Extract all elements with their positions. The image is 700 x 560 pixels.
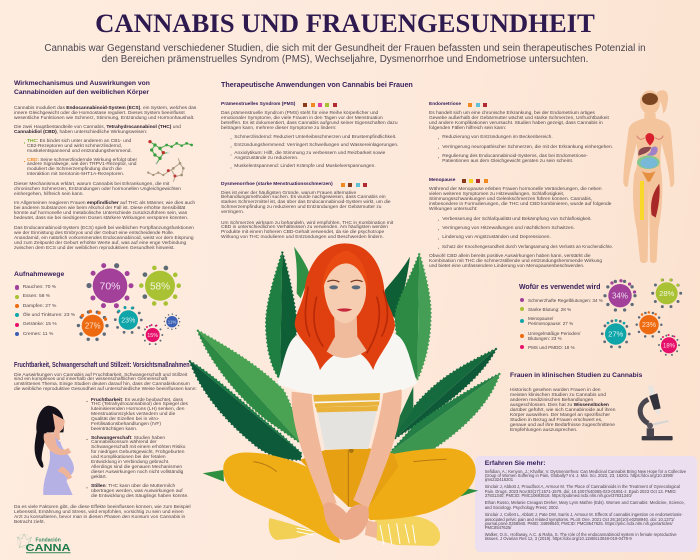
legend item: Unregelmäßige xyxy=(520,331,580,341)
text: Dysmenorrhoe: Behandlungsmethoden suchen. Es wurde nachgewiesen, dass Cannabis ein xyxy=(221,195,386,200)
bubble: 11: 11% xyxy=(168,319,176,324)
text: Einleitung: die weibliche reproduktive Gesundheit auf unterschiedliche Weise beeinflussen kann: xyxy=(14,387,197,392)
text: Dysmenorrhoe xyxy=(221,190,391,215)
text: empfindlicher: könnte auf hormonelle und metabolische Unterschiede zurückzuführen sein, was xyxy=(14,211,187,216)
text: Frauen in klinischen Studien: ausgeschlossen. Dies hat zu Wissenslücken xyxy=(510,403,609,408)
text: Frauen in klinischen Studien: meisten klinischen Studien zu Cannabis und xyxy=(510,393,606,398)
reference 4 xyxy=(485,513,683,530)
heart xyxy=(645,133,654,146)
heading: Erfahren Sie mehr: Erfahren Sie mehr: xyxy=(485,460,546,467)
color squares: Menopause xyxy=(462,179,488,183)
text: empfindlicher xyxy=(14,200,195,221)
text: Hauptbestandteile: Die zwei Hauptbestandteile von Cannabis, Tetrahydrocannabinol (THC) und xyxy=(14,125,181,130)
legend item: PMS: PMS und PMDD: 18 % xyxy=(528,345,575,350)
text: empfindlicher: bei anderen Substanzen wie beim Alkohol der Fall ist. Diese erhöhte Sensibilität xyxy=(14,206,185,211)
text: Menopause: Während der Menopause erleben Frauen hormonelle Veränderungen, die neben xyxy=(429,187,602,192)
bullet: Fruchtbarkeit: Fruchtbarkeit: Es wurde beobachtet, dass xyxy=(91,398,183,402)
text: THC CBD Kombination: Produkte mit einem höheren CBD-Gehalt verwendet, da sie die psychotrope xyxy=(221,230,384,235)
reference 2: 37831340; PMCID: PMC10693518. https://pubmed.ncbi.nlm.nih.gov/37831340/ xyxy=(485,493,632,498)
text: CBD: moduliert die Schmerzempfindung durch die xyxy=(27,167,122,172)
text: THC CBD Kombination: CBD in unterschiedlichen Verhältnissen zu verwenden. Am häufigsten werden xyxy=(221,225,388,230)
list: PMS xyxy=(234,134,398,169)
logo: Fundación CANNA: CANNA xyxy=(26,543,71,554)
reference 5: Walker, O.S., Holloway, A.C. & Raha, S. The role of the endocannabinoid system in female reproductive xyxy=(485,532,677,537)
nerve xyxy=(640,181,644,220)
chart: Aufnahmewege bubbles xyxy=(78,265,180,345)
heading: Therapeutische Anwendungen: Therapeutische Anwendungen von Cannabis bei Frauen xyxy=(221,80,413,89)
text: Menopause: insbesondere in Formulierungen, die THC und CBD kombinieren, wurde auf folgende xyxy=(429,202,611,207)
bullet: Fruchtbarkeit: Qualität der Eizellen bei in vitro- xyxy=(91,417,159,422)
subheading: PMS: Prämenstruelles Syndrom (PMS) xyxy=(221,102,295,107)
text: Dysmenorrhoe: verringern. xyxy=(221,210,244,215)
uterus xyxy=(642,171,656,182)
bubble: 27: 27% xyxy=(85,322,101,331)
text: THC CBD Kombination: Wirkung von THC modulieren und Entzündungen und Beschwerden lindern. xyxy=(221,235,384,240)
heading: Wirkmechanismus xyxy=(14,80,150,96)
reference 3: Ethan Russo, Melanie Creagan Dreher, Mary Lynn Mathre (Eds). Women and Cannabis: Medicine, Science, xyxy=(485,500,685,505)
text: Frauen in klinischen Studien xyxy=(510,388,616,433)
bullet: Stillen: übertragen werden, was Auswirkungen auf xyxy=(91,489,183,494)
list: Endometriose: Patientinnen aus dem Gleichgewicht geraten zu sein scheint. xyxy=(442,159,573,164)
legend item: Menopause: Menopause/ xyxy=(528,316,553,321)
text: PMS: emotionaler Symptome, die viele Frauen in den Tagen vor der Menstruation xyxy=(221,116,383,121)
text: ECS: wesentliche Funktionen wie Schmerz, Stimmung, Entzündung und Hormonhaushalt. xyxy=(14,116,194,121)
bubble: 34: 34% xyxy=(612,292,628,301)
bullet: Fruchtbarkeit xyxy=(91,398,188,432)
reference 4: associated pelvic pain and related symptoms. PLoS One. 2021 Oct 26;16(10):e0258940. doi: 10.1371/ xyxy=(485,517,674,522)
icon: pregnant woman xyxy=(35,406,74,495)
bullet: Fruchtbarkeit: THC (Tetrahydrocannabinol) den Spiegel des xyxy=(91,402,188,407)
text: Einleitung: Die Auswirkungen von Cannabis auf Fruchtbarkeit, Schwangerschaft und Stillzeit xyxy=(14,372,187,378)
bullet: Schwangerschaft xyxy=(91,436,186,480)
text: Einleitung xyxy=(14,372,197,392)
text: Menopause xyxy=(429,186,612,212)
text: Schluss: Betracht zieht. xyxy=(14,520,45,525)
bullet: Schwangerschaft: geklärt. xyxy=(91,475,107,480)
bullet: Schwangerschaft: Entwicklung in Verbindung gebracht. xyxy=(91,460,169,465)
panel: Endometriose und Menopause xyxy=(429,102,613,269)
bullet: Fruchtbarkeit: Fertilisationsbehandlungen (IVF) xyxy=(91,422,161,427)
reference 2: Sinclair J, Abbott J, Proudfoot A, Armour M. The Place of Cannabinoids in the Treatment of Gynecological xyxy=(485,484,680,489)
icon: CBD molecule xyxy=(147,158,185,182)
text: Frauen in klinischen Studien: Studien in Bezug auf Frauen erschwert es, xyxy=(510,418,602,423)
list: Menopause: Verringerung von Hitzewallungen und nächtlichem Schwitzen. xyxy=(442,226,575,231)
reference 5: tissues. J Ovarian Res 12, 3 (2019). https://doi.org/10.1186/s13048-019-0478-9 xyxy=(485,536,632,541)
text: Hauptbestandteile: Cannabidiol (CBD), haben unterschiedliche Wirkungsweisen: xyxy=(14,130,147,135)
legend item: Starke Blutung: Starke Blutung: 28 % xyxy=(528,307,571,312)
reference 2 xyxy=(485,485,680,498)
text: THC: CB2-Rezeptoren und wirkt schmerzlindernd, xyxy=(27,144,122,149)
text: Dysmenorrhoe: Schmerzempfindung zu reduzieren und Entzündungen der Gebärmutter zu xyxy=(221,205,381,210)
panel: Wirkmechanismus xyxy=(14,80,196,251)
bubble: 27: 27% xyxy=(608,330,624,339)
text: THC CBD Kombination: Um Schmerzen wirksam zu behandeln, wird empfohlen, THC in Kombination mit xyxy=(221,220,393,226)
bullet: Schwangerschaft: Schwangerschaft: Studien haben xyxy=(91,436,165,440)
text: Frauen in klinischen Studien: Körper auswirken. Der Mangel an spezifischer xyxy=(510,413,610,418)
text: Frauen in klinischen Studien: Historisch gesehen wurden Frauen in den xyxy=(510,388,601,392)
muscle xyxy=(651,184,660,218)
legend item: Unregelmäßige: Unregelmäßige Perioden/ xyxy=(528,331,580,336)
text: CBD: CBD: Seine schmerzlindernde Wirkung erfolgt über xyxy=(27,158,137,162)
subheading: Menopause: Menopause xyxy=(429,178,455,183)
legend item: Rauchen: Rauchen: 70 % xyxy=(23,285,56,290)
text: THC CBD Kombination xyxy=(221,220,394,240)
text: THC: THC: Es bindet sich unter anderem an CB1- und xyxy=(27,139,131,144)
bubble: 28: 28% xyxy=(659,289,675,298)
heading: Wirkmechanismus: Wirkmechanismus und Auswirkungen von xyxy=(14,80,150,87)
bullet: Schwangerschaft: für niedriges Geburtsgewicht, Frühgeburten xyxy=(91,450,184,455)
text: ECS: innere Gleichgewicht oder die Homöostase reguliert. Dieses System beeinflusst xyxy=(14,111,185,116)
text: PMS: Das prämenstruelle Syndrom (PMS) steht für eine Reihe körperlicher und xyxy=(221,111,378,116)
subheading: Dysmenorrhoe: Dysmenorrhoe (starke Menstruationsschmerzen) xyxy=(221,182,333,187)
text: Menopause Schluss: Kombination mit THC die schmerzstillende und entzündungshemmende Wirkung xyxy=(429,259,602,264)
reference 3: and Sociology. Psychology Press; 2002. xyxy=(485,505,559,510)
bullet: Stillen xyxy=(91,484,188,499)
text: PMS: betreffen. Es ist dokumentiert, dass Cannabis aufgrund seiner Eigenschaften dazu xyxy=(221,121,398,126)
text: ECS xyxy=(14,106,196,121)
panel: Therapeutische Anwendungen links xyxy=(221,80,413,240)
text: Mechanismus xyxy=(14,182,181,197)
face xyxy=(324,263,366,323)
text: Menopause: Stimmungsschwankungen und Gelenkschmerzen führen können. Cannabis, xyxy=(429,197,592,202)
text: Endometriose: Es handelt sich um eine chronische Erkrankung, bei der Endometrium artiges xyxy=(429,111,595,116)
breast glands xyxy=(637,136,663,139)
logo: Fundación CANNA xyxy=(17,534,71,554)
legend item: Dampfen: Dampfen: 27 % xyxy=(23,304,56,309)
subheading: Endometriose: Endometriose xyxy=(429,102,461,107)
reference 5 xyxy=(485,533,677,542)
text: Hauptbestandteile xyxy=(14,124,181,135)
illustration: woman with cannabis leaves xyxy=(189,243,500,546)
reference 3 xyxy=(485,501,685,510)
text: CBD xyxy=(27,158,138,177)
bullet: Schwangerschaft: dieser Auswirkungen noch nicht vollständig xyxy=(91,470,183,475)
color squares: Dysmenorrhoe xyxy=(341,183,367,187)
bubble: 18: 18% xyxy=(663,344,676,350)
hair xyxy=(295,243,395,370)
text: empfindlicher: bedeutet, dass sie bei niedrigeren Dosen stärkere Wirkungen verspüren könnten. xyxy=(14,216,188,221)
text: Schluss xyxy=(14,504,191,525)
panel: Frauen in klinischen Studien xyxy=(510,370,630,434)
panel: Aufnahmewege legend xyxy=(14,271,75,336)
list: PMS: Schmerzlindernd: Reduziert Unterleibsschmerzen und Brustempfindlichkeit. xyxy=(234,135,396,140)
reference 2: Pain. Drugs. 2023 Nov;83(17):1571-1579. doi: 10.1007/s40265-023-01951-z. Epub 2023 Oct 13. PMID: xyxy=(485,489,677,494)
text: Fortpflanzung: Das Endocannabinoid-System (ECS) spielt bei weiblichen Fortpflanzungsfunktionen xyxy=(14,226,194,231)
list: PMS: Muskelentspannend: Lindert Krämpfe und Muskelverspannungen. xyxy=(234,164,376,169)
title: CANNABIS UND FRAUENGESUNDHEIT xyxy=(95,8,595,38)
bubble: 15: 15% xyxy=(147,333,158,339)
text: Menopause: vielen weiteren Symptomen zu Hitzewallungen, Schlaflosigkeit, xyxy=(429,192,564,197)
text: Frauen in klinischen Studien: anderen medizinischen Behandlungen xyxy=(510,398,593,403)
text: Frauen in klinischen Studien: Empfehlungen auszusprechen. xyxy=(510,428,577,433)
text: Fortpflanzung: wie der Einnistung des Embryos und der Geburt eine entscheidende Rolle. xyxy=(14,231,174,236)
legend item: Cremes: Cremes: 11 % xyxy=(23,332,53,336)
reference 1: Sefidian, A.; Kenyon, J.; Khalfar, V. Dysmenorrhea: Can Medicinal Cannabis Bring New Hope for a Collective xyxy=(485,469,686,474)
list: Endometriose: Verringerung neuropathischer Schmerzen, die mit der Erkrankung einhergehen. xyxy=(442,145,613,150)
list: PMS: Entzündungshemmend: Verringert Schwellungen und Wassereinlagerungen. xyxy=(234,143,398,148)
list: PMS: Angstzustände zu reduzieren. xyxy=(234,156,298,161)
subtitle: Cannabis war Gegenstand verschiedener Studien, die sich mit der Gesundheit der Frauen befassten und sein therapeutisches Potenzial in xyxy=(44,42,646,54)
heading: Wofür: Wofür es verwendet wird xyxy=(519,284,600,290)
list: Menopause: Schutz der Knochengesundheit durch Verlangsamung des Verlusts an Knochendichte. xyxy=(442,245,613,250)
heading: Wirkmechanismus: Cannabinoiden auf den weiblichen Körper xyxy=(14,89,149,96)
bubble: 23: 23% xyxy=(642,322,656,329)
chart: Wofür bubbles xyxy=(602,279,681,355)
liver and stomach xyxy=(638,147,651,156)
text: Einleitung: umstrittenes Thema. Einige Studien deuten darauf hin, dass der Cannabiskonsum xyxy=(14,382,190,387)
text: Endometriose: und andere Komplikationen verursacht. Studien haben gezeigt, dass Cannabis in xyxy=(429,121,603,126)
text: CBD: andere Signalwege, wie den TRPV1-Rezeptor, und xyxy=(27,162,137,167)
text: Endometriose: Gewebe außerhalb der Gebärmutter wächst und starke Schmerzen, Unfruchtbarkeit xyxy=(429,116,609,121)
shoes xyxy=(269,518,317,540)
panel: Erfahren Sie mehr xyxy=(475,456,697,552)
text: Dysmenorrhoe: Dies ist einer der häufigsten Gründe, warum Frauen alternative xyxy=(221,190,356,196)
reference 1: ijms232416201 xyxy=(485,477,513,482)
text: Schluss: Arzt zu konsultieren, bevor man in diesen Phasen den Konsum von Cannabis in xyxy=(14,515,185,520)
arms and hands xyxy=(292,392,337,507)
list: Menopause: Verbesserung der Schlafqualität und Bekämpfung von Schlaflosigkeit. xyxy=(442,217,592,222)
bullet: Stillen: Stillen: THC kann über die Muttermilch xyxy=(91,484,175,489)
subtitle xyxy=(44,42,646,64)
logo: Fundación CANNA: Fundación xyxy=(36,538,61,544)
legend item: Unregelmäßige: Blutungen: 23 % xyxy=(528,336,562,341)
text: Fortpflanzung: und zum Zeitpunkt der Geburt erhöhte Werte auf, was auf eine enge Verbindung xyxy=(14,241,186,246)
list: Endometriose: Regulierung des Endocannabinoid-Systems, das bei Endometriose- xyxy=(442,154,588,159)
legend item: Schmerzhafte: Schmerzhafte Regelblutungen: 34 % xyxy=(528,298,603,302)
text: Dysmenorrhoe: starkes Schmerzmittel ist, das über das Endocannabinoid-System wirkt, um die xyxy=(221,200,391,205)
text: Frauen in klinischen Studien: darüber geführt, wie sich Cannabinoide auf ihren xyxy=(510,408,616,413)
color squares: Endometriose xyxy=(468,103,487,107)
list: Menopause xyxy=(442,216,613,250)
text: PMS: beitragen kann, mehrere dieser Symptome zu lindern: xyxy=(221,126,337,131)
text: Fortpflanzung xyxy=(14,226,194,251)
text: Menopause Schluss: Obwohl CBD allein bereits positive Auswirkungen haben kann, verstärkt die xyxy=(429,254,591,259)
reference 1 xyxy=(485,470,686,483)
legend item: Menopause: Perimenopause: 27 % xyxy=(528,321,573,326)
bubble: 58: 58% xyxy=(150,281,170,292)
text: THC: muskelentspannend und entzündungshemmend. xyxy=(27,149,132,154)
brain xyxy=(642,93,658,105)
text: Fortpflanzung: zwischen dem ECS und der weiblichen reproduktiven Gesundheit hinweist. xyxy=(14,246,175,251)
cannabis leaves xyxy=(189,247,500,497)
list: PMS: Anxiolytikum: Hilft, die Stimmung zu verbessern und Reizbarkeit sowie xyxy=(234,151,385,156)
bubble: 23: 23% xyxy=(121,318,135,325)
legend item: Essen: Essen: 58 % xyxy=(23,294,50,299)
icon: THC molecule xyxy=(148,140,193,164)
reference 4: PMC8547625/ xyxy=(485,525,511,530)
text: Frauen in klinischen Studien: genaue und auf ihre Bedürfnisse zugeschnittene xyxy=(510,423,615,428)
bubble: 70: 70% xyxy=(99,280,121,292)
bullet: Schwangerschaft: Allerdings sind die genauen Mechanismen xyxy=(91,465,182,470)
neck and chest xyxy=(327,313,367,358)
bullet: Schwangerschaft: und Komplikationen bei der fetalen xyxy=(91,455,166,460)
text: Menopause: Wirkungen untersucht: xyxy=(429,207,477,212)
bullet: Stillen: die Entwicklung des Säuglings haben könnte. xyxy=(91,494,188,499)
bullet: Fruchtbarkeit: beeinträchtigen kann. xyxy=(91,427,137,432)
illustration: human body with organs xyxy=(623,90,674,263)
text: empfindlicher: Im Allgemeinen reagieren Frauen empfindlicher auf THC als Männer, wie dies auch xyxy=(14,201,195,206)
text: Schluss: Da es viele Faktoren gibt, die diese Effekte beeinflussen können, wie zum Beispiel xyxy=(14,505,191,510)
legend item: Menopause xyxy=(520,316,574,326)
body silhouette xyxy=(623,113,674,263)
text: CBD: Interaktion mit Serotonin-5HT1A-Rezeptoren. xyxy=(27,172,124,177)
list: Endometriose xyxy=(442,134,613,164)
heading: Aufnahmewege: Aufnahmewege xyxy=(14,271,64,278)
text: Fortpflanzung: Anandamid, ein natürlich vorkommendes Endocannabinoid, weist vor dem Eisprung xyxy=(14,236,194,241)
legend item: Getränke: Getränke: 15 % xyxy=(23,322,57,327)
bullet: Schwangerschaft: Cannabiskonsum während der xyxy=(91,440,157,445)
text: Mechanismus: einhergehen, hilfreich sein kann. xyxy=(14,192,84,197)
reference 1: Group of Women Suffering in Pain, Globally? Int. J. Mol. Sci. 2022, 23, 16201. https://doi.org/10.3390/ xyxy=(485,473,673,478)
reference 4: Sinclair J, Collett L, Abbott J, Pate DW, Sarris J, Armour M. Effects of cannabis ingestion on endometriosis- xyxy=(485,512,683,517)
text: Schluss: Lebensstil, Ernährung und Stress, wird empfohlen, vorsichtig zu sein und einen xyxy=(14,510,184,515)
text: Endometriose: folgenden Fällen hilfreich sein kann: xyxy=(429,126,506,131)
color squares: PMS xyxy=(303,103,337,107)
list: Menopause: Linderung von Angstzuständen und Depressionen. xyxy=(442,235,551,240)
heading: Fruchtbarkeit: Fruchtbarkeit, Schwangerschaft und Stillzeit: Vorsichtsmaßnahmen xyxy=(14,360,190,368)
text: THC xyxy=(27,138,132,154)
shirt xyxy=(277,333,417,448)
bullet: Fruchtbarkeit: Menstruationszyklus verändern und die xyxy=(91,412,175,417)
intestines xyxy=(637,156,660,169)
bullet: Schwangerschaft: Schwangerschaft mit einem erhöhten Risiko xyxy=(91,445,186,450)
text: PMS xyxy=(221,110,398,131)
heading: Frauen in klinischen Studien: Frauen in klinischen Studien zu Cannabis xyxy=(510,372,642,378)
subtitle: den Bereichen prämenstruelles Syndrom (PMS), Wechseljahre, Dysmenorrhoe und Endometriose untersuchten. xyxy=(102,54,588,64)
text: Mechanismus: chronischen Schmerzen, Entzündungen oder hormonellen Ungleichgewichten xyxy=(14,187,181,192)
panel: Wofür legend xyxy=(519,284,603,350)
text: Endometriose xyxy=(429,110,609,131)
text: Einleitung: sind ein komplexes und innerhalb der wissenschaftlichen Gemeinschaft xyxy=(14,377,167,382)
panel: Fruchtbarkeit xyxy=(14,360,197,525)
pants xyxy=(347,448,476,520)
text: ECS: Cannabis moduliert das Endocannabinoid-System (ECS), ein System, welches das xyxy=(14,106,196,111)
text: Menopause Schluss xyxy=(429,254,602,269)
text: Menopause Schluss: und bietet eine umfassendere Linderung von Menopausenbeschwerden. xyxy=(429,264,584,269)
icon: microscope xyxy=(640,385,673,440)
bullet: Fruchtbarkeit: luteinisierenden Hormons (LH) senken, den xyxy=(91,407,184,412)
reference 4: journal.pone.0258940. PMID: 34699540; PMCID: PMC8547625. https://pmc.ncbi.nlm.nih.gov/articles/ xyxy=(485,521,673,526)
legend item: Öle: Öle und Tinkturen: 23 % xyxy=(23,313,75,318)
list: Endometriose: Reduzierung von Entzündungen im Beckenbereich. xyxy=(442,135,553,140)
text: Mechanismus: Dieser Mechanismus erklärt, warum Cannabis bei Erkrankungen, die mit xyxy=(14,182,169,187)
